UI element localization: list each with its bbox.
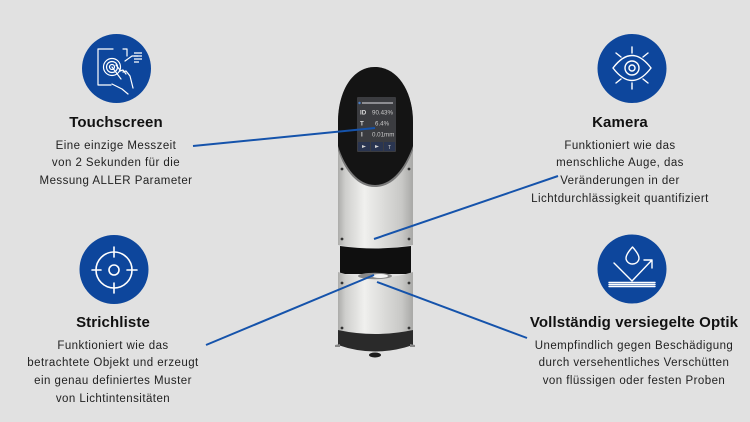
black gap section bbox=[340, 246, 411, 274]
text block: Kamera bbox=[531, 114, 709, 205]
lens aperture bbox=[358, 273, 392, 279]
body text: Strichliste: Funktioniert wie das bbox=[57, 340, 169, 352]
screws bbox=[341, 168, 410, 329]
body text: Strichliste bbox=[27, 340, 199, 405]
display screen: 6.4% bbox=[375, 120, 390, 128]
display screen: ID bbox=[360, 110, 367, 116]
black display head bbox=[338, 67, 413, 187]
black base bbox=[338, 330, 413, 352]
body text: Kamera: Veränderungen in der bbox=[560, 175, 680, 187]
icon: touchscreen bbox=[82, 34, 151, 103]
connector: Strichliste bbox=[206, 275, 374, 345]
body text: Vollstaendig versiegelte Optik: Unempfindlich gegen Beschädigung bbox=[535, 340, 733, 352]
body text: Strichliste: ein genau definiertes Muster bbox=[34, 375, 192, 387]
body text: Touchscreen: Messung ALLER Parameter bbox=[40, 175, 192, 187]
body text: Touchscreen: von 2 Sekunden für die bbox=[52, 157, 180, 169]
display screen bbox=[357, 97, 396, 152]
connector: Vollstaendig versiegelte Optik bbox=[377, 282, 527, 338]
icon: eye bbox=[598, 34, 666, 103]
body text: Strichliste: betrachtete Objekt und erzeugt bbox=[27, 357, 199, 369]
lower silver body bbox=[338, 272, 413, 334]
heading: Touchscreen: Touchscreen bbox=[69, 114, 163, 131]
display screen: T bbox=[360, 120, 364, 128]
body text: Kamera: Lichtdurchlässigkeit quantifiziert bbox=[531, 193, 709, 205]
body text: Vollstaendig versiegelte Optik bbox=[535, 340, 733, 387]
display screen: 0.01mm bbox=[372, 132, 394, 138]
foot bbox=[369, 352, 381, 358]
body text: Kamera: menschliche Auge, das bbox=[556, 157, 684, 169]
heading: Kamera: Kamera bbox=[592, 114, 648, 131]
body text: Kamera: Funktioniert wie das bbox=[564, 140, 676, 152]
text block: Vollstaendig versiegelte Optik bbox=[530, 314, 738, 387]
body text: Touchscreen: Eine einzige Messzeit bbox=[56, 140, 176, 152]
body text: Vollstaendig versiegelte Optik: durch versehentliches Verschütten bbox=[539, 357, 729, 369]
device bbox=[335, 67, 415, 358]
body text: Touchscreen bbox=[40, 140, 192, 187]
body text: Kamera bbox=[531, 140, 709, 205]
text block: Touchscreen bbox=[40, 114, 192, 187]
connector: Kamera bbox=[374, 176, 558, 239]
upper silver body bbox=[338, 125, 413, 248]
display screen: 90.43% bbox=[372, 110, 393, 116]
heading: Strichliste: Strichliste bbox=[76, 314, 150, 331]
connector: Touchscreen bbox=[193, 128, 375, 146]
text block: Strichliste bbox=[27, 314, 199, 405]
body text: Vollstaendig versiegelte Optik: von flüssigen oder festen Proben bbox=[543, 375, 725, 387]
display screen: T bbox=[388, 145, 391, 151]
body text: Strichliste: von Lichtintensitäten bbox=[56, 393, 170, 405]
icon: crosshair target bbox=[80, 235, 148, 304]
heading: Vollstaendig versiegelte Optik: Vollständig versiegelte Optik bbox=[530, 314, 738, 331]
display screen: I bbox=[361, 132, 363, 138]
icon: sealed surface with drop bbox=[598, 234, 666, 304]
